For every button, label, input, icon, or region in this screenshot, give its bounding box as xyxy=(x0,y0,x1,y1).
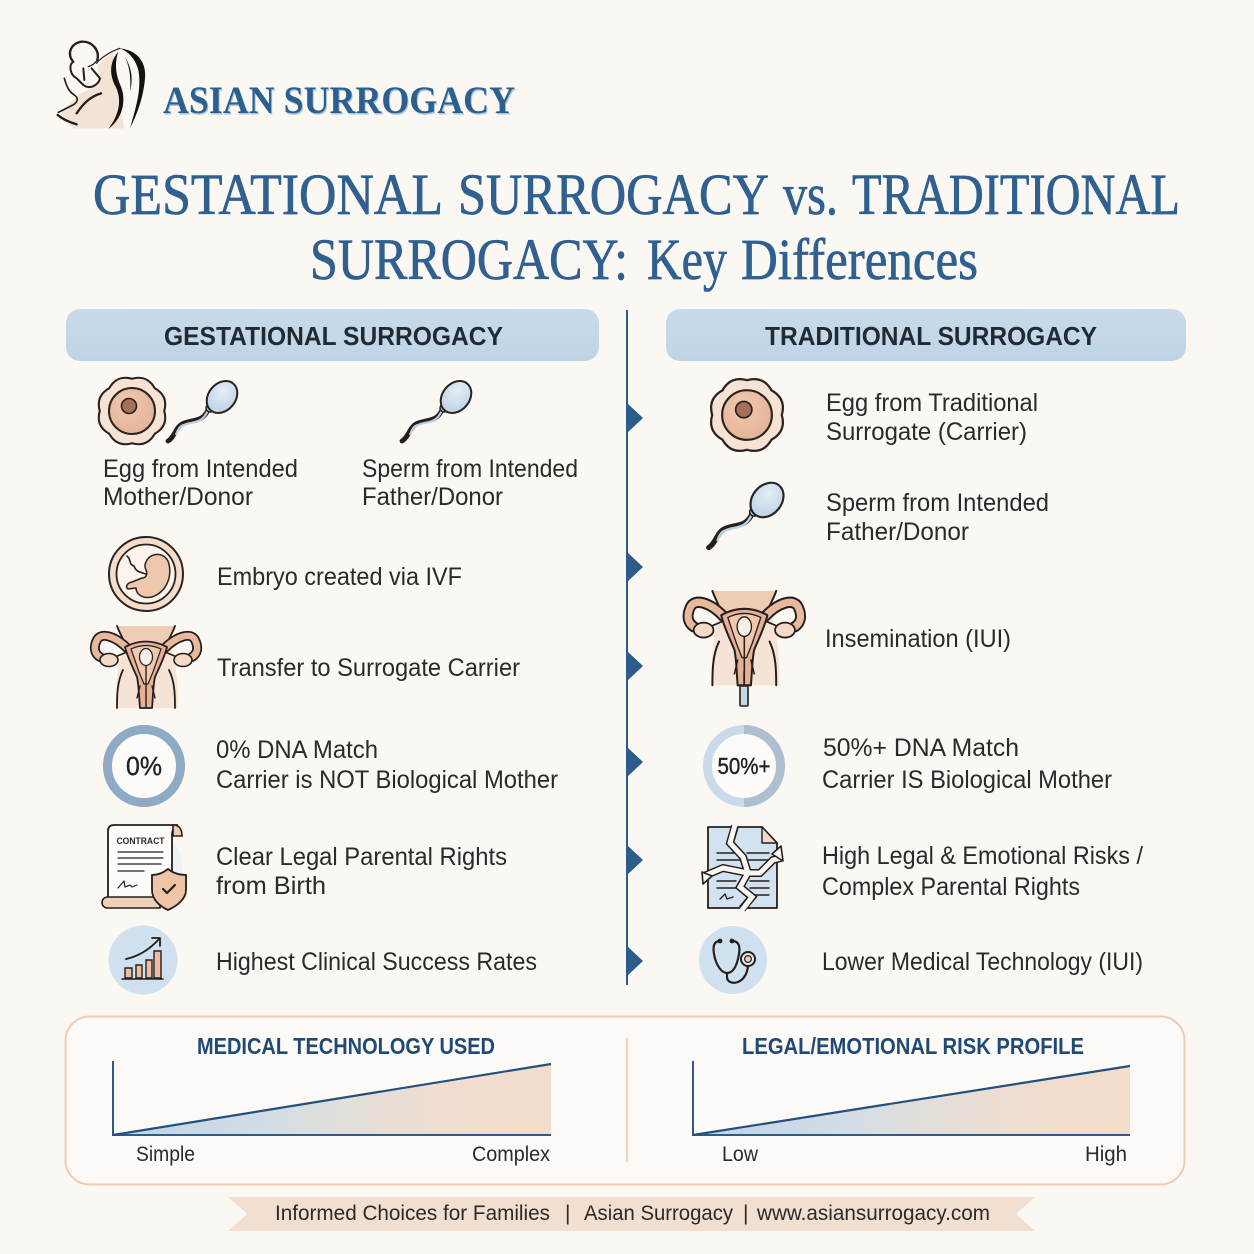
chart: legal/emotional risk profile xyxy=(693,1033,1130,1166)
icon: sperm xyxy=(709,476,790,548)
icon: torn contract xyxy=(702,825,783,910)
heading: traditional surrogacy xyxy=(666,309,1186,361)
logo: Asian Surrogacy: ASIAN SURROGACY xyxy=(163,79,515,122)
footer ribbon: Asian Surrogacy xyxy=(584,1202,733,1225)
text: sperm source: Sperm from Intended xyxy=(826,489,1049,517)
title: TRADITIONAL xyxy=(852,162,1180,227)
title: vs. xyxy=(783,162,838,227)
logo mark: mother and baby xyxy=(58,42,145,129)
icon: uterus with insemination syringe xyxy=(688,591,801,706)
title: SURROGACY xyxy=(458,162,769,227)
heading: gestational surrogacy xyxy=(66,309,599,361)
icon: contract with shield xyxy=(102,825,186,910)
icon: egg xyxy=(711,379,783,451)
chart: legal/emotional risk profile: LEGAL/EMOTIONAL RISK PROFILE xyxy=(742,1033,1084,1059)
icon: sperm right column xyxy=(402,375,478,441)
panel: traditional surrogacy xyxy=(666,309,1186,994)
footer ribbon xyxy=(228,1197,1035,1231)
text: DNA match xyxy=(822,734,1112,794)
text: sperm source: Father/Donor xyxy=(826,518,969,546)
chart: legal/emotional risk profile: Low xyxy=(722,1143,759,1166)
title xyxy=(93,162,1180,292)
panel: gestational surrogacy xyxy=(66,309,599,994)
text: sperm source xyxy=(362,455,578,511)
icon: uterus xyxy=(95,626,197,708)
text: egg source: Surrogate (Carrier) xyxy=(826,418,1027,446)
text: legal rights: from Birth xyxy=(216,872,326,900)
title: Key xyxy=(647,227,727,292)
text: legal risks xyxy=(822,842,1143,901)
icon: 0% ring: 0% xyxy=(126,751,162,781)
text: DNA match: 0% DNA Match xyxy=(216,736,378,764)
icon: contract with shield: CONTRACT xyxy=(116,836,165,846)
text: sperm source: Father/Donor xyxy=(362,483,503,511)
icon: sperm xyxy=(168,375,244,441)
chart: medical technology used: MEDICAL TECHNOLOGY USED xyxy=(197,1033,495,1059)
icon: 0% ring xyxy=(108,730,180,802)
text: transfer: Transfer to Surrogate Carrier xyxy=(217,654,520,682)
heading: gestational surrogacy: GESTATIONAL SURROGACY xyxy=(164,321,503,351)
text: technology: Lower Medical Technology (IUI) xyxy=(822,948,1143,976)
chart: legal/emotional risk profile: High xyxy=(1085,1143,1127,1166)
text: legal rights: Clear Legal Parental Rights xyxy=(216,843,507,871)
icon: 50% ring xyxy=(708,730,780,802)
text: DNA match: 50%+ DNA Match xyxy=(823,734,1019,762)
text: embryo: Embryo created via IVF xyxy=(217,563,462,591)
text: legal risks: High Legal & Emotional Risks / xyxy=(822,842,1143,870)
text: egg source xyxy=(826,389,1038,446)
chart: medical technology used: Simple xyxy=(136,1143,195,1166)
text: egg source: Egg from Traditional xyxy=(826,389,1038,417)
central divider with arrow markers xyxy=(626,310,643,985)
text: egg source: Mother/Donor xyxy=(103,483,253,511)
text: insemination: Insemination (IUI) xyxy=(825,625,1011,653)
text: sperm source: Sperm from Intended xyxy=(362,455,578,483)
text: success rates: Highest Clinical Success Rates xyxy=(216,948,537,976)
text: legal risks: Complex Parental Rights xyxy=(822,873,1080,901)
title: SURROGACY: xyxy=(310,227,628,292)
chart: medical technology used xyxy=(113,1033,551,1166)
logo wordmark: ASIAN SURROGACY xyxy=(164,80,516,124)
footer ribbon: Informed Choices for Families xyxy=(275,1202,550,1225)
title: Differences xyxy=(741,227,978,292)
icon: 50% ring: 50%+ xyxy=(718,753,770,779)
text: egg source xyxy=(103,455,298,511)
icon: stethoscope xyxy=(699,926,767,994)
icon: egg xyxy=(99,378,165,444)
footer ribbon: www.asiansurrogacy.com xyxy=(756,1202,990,1225)
icon: embryo xyxy=(109,537,183,611)
text: sperm source xyxy=(826,489,1049,546)
icon: growth chart xyxy=(108,926,178,994)
title: GESTATIONAL xyxy=(93,162,443,227)
panel: comparison charts xyxy=(66,1016,1184,1184)
text: DNA match xyxy=(216,736,558,794)
text: legal rights xyxy=(216,843,507,900)
footer ribbon: | xyxy=(565,1202,570,1225)
text: DNA match: Carrier IS Biological Mother xyxy=(822,766,1112,794)
heading: traditional surrogacy: TRADITIONAL SURROGACY xyxy=(765,321,1097,351)
logo: Asian Surrogacy xyxy=(58,42,516,129)
chart: medical technology used: Complex xyxy=(472,1143,550,1166)
text: DNA match: Carrier is NOT Biological Mother xyxy=(216,766,558,794)
footer ribbon: | xyxy=(743,1202,748,1225)
text: egg source: Egg from Intended xyxy=(103,455,298,483)
